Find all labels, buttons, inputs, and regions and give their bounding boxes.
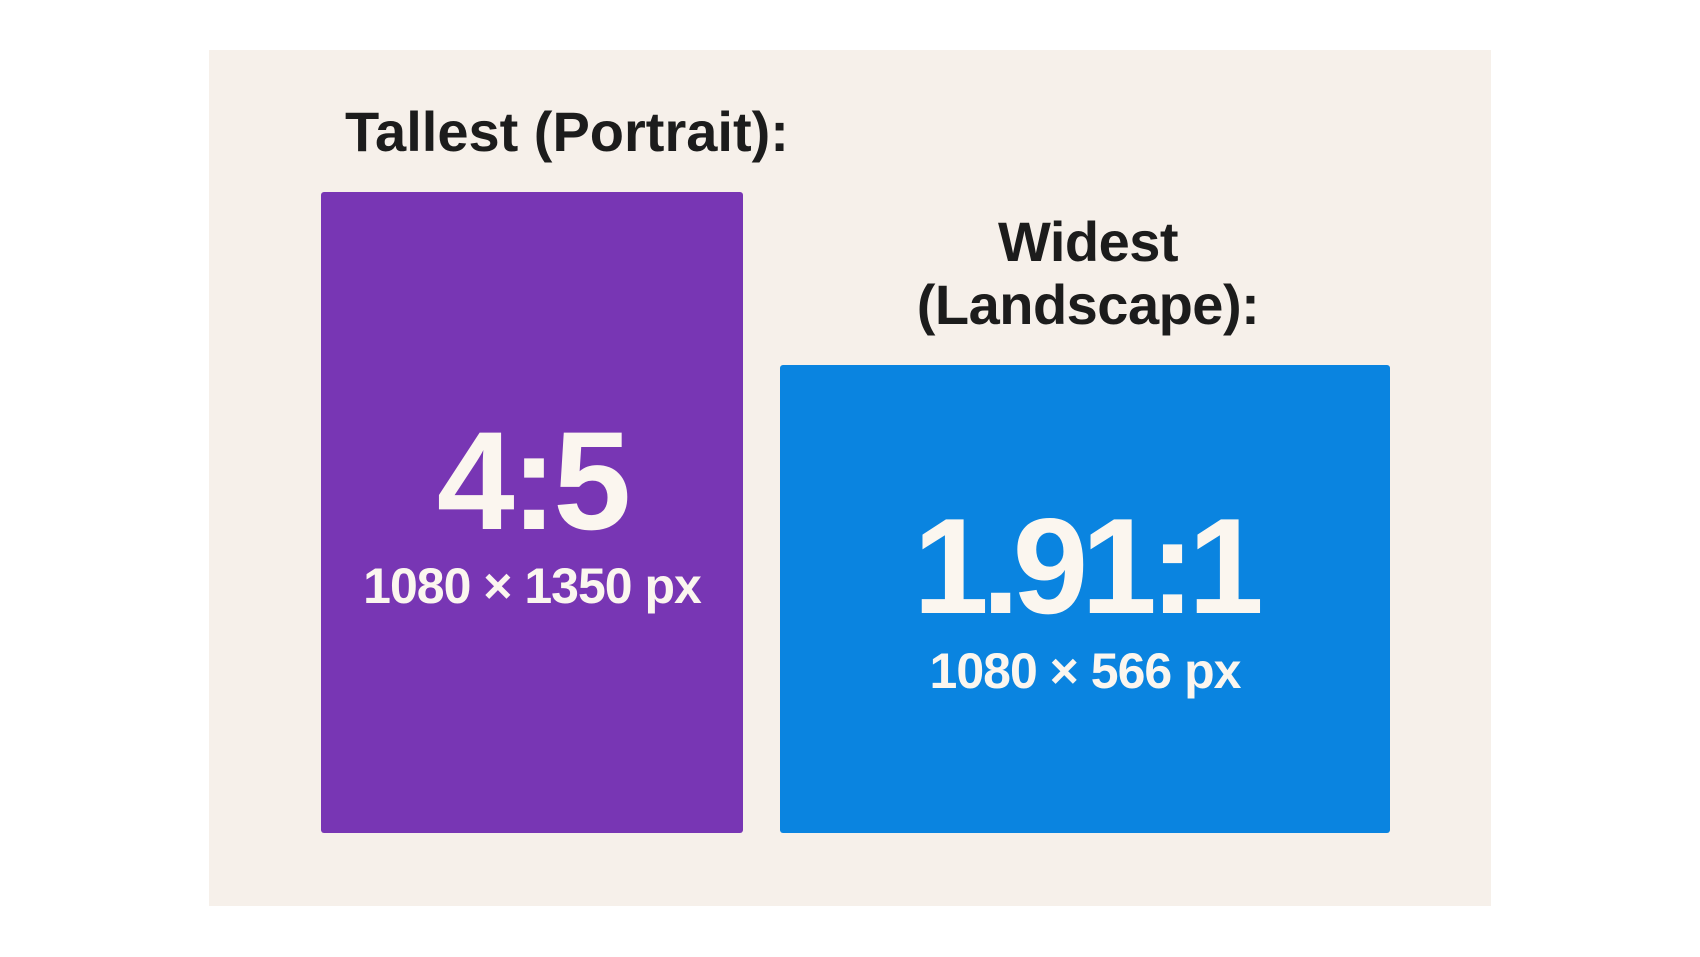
ratio 4:5: 4:5 bbox=[437, 402, 627, 559]
heading: tallest: Tallest (Portrait): bbox=[345, 100, 789, 163]
heading: widest bbox=[917, 210, 1259, 336]
dimensions portrait: 1080 × 1350 px bbox=[363, 558, 701, 614]
heading: widest: Widest bbox=[998, 210, 1178, 273]
panel: background card bbox=[209, 50, 1491, 906]
panel: landscape box bbox=[780, 365, 1390, 833]
heading: widest: (Landscape): bbox=[917, 273, 1259, 336]
dimensions landscape: 1080 × 566 px bbox=[930, 643, 1240, 699]
panel: portrait box bbox=[321, 192, 743, 833]
ratio 1.91:1: 1.91:1 bbox=[913, 490, 1257, 642]
